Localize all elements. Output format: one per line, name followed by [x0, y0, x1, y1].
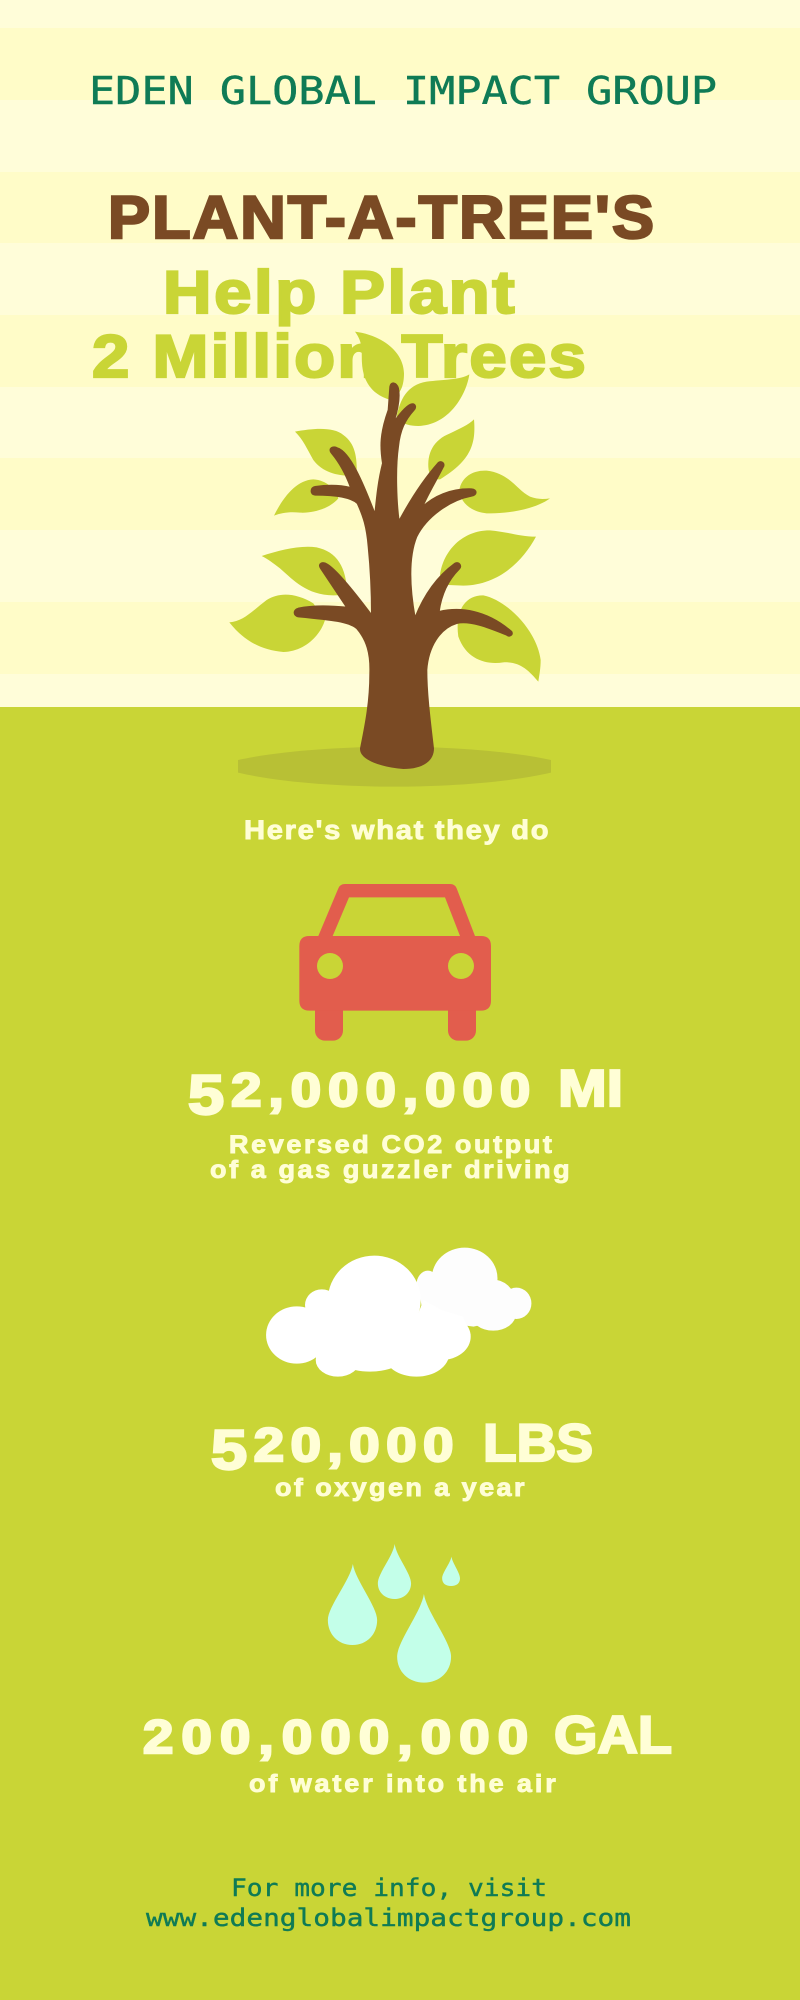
icon: water drops [328, 1544, 460, 1683]
statistic: miles: 2,000,000 [231, 1064, 530, 1116]
statistic: miles: 5 [188, 1063, 224, 1126]
tree trunk and branches [294, 383, 512, 768]
icon: clouds [266, 1248, 531, 1377]
statistic: gallons: 200,000,000 [143, 1711, 528, 1763]
statistic: pounds: 5 [211, 1418, 247, 1481]
icon: tree [229, 332, 550, 768]
text: miles description line two: of a gas guzzler driving [210, 1155, 570, 1184]
heading: help plant line one: Help Plant [163, 259, 515, 326]
statistic: pounds [211, 1414, 593, 1481]
icon: ground shadow [238, 747, 551, 787]
statistic: gallons: GAL [554, 1706, 672, 1765]
footer: more info line: For more info, visit [231, 1874, 547, 1902]
panel: striped sky background [0, 0, 800, 707]
heading: organisation name: EDEN GLOBAL IMPACT GROUP [89, 69, 717, 113]
small back cloud [416, 1248, 531, 1331]
statistic: miles: MI [558, 1060, 623, 1118]
icon: red car [299, 884, 491, 1041]
statistic: miles [188, 1060, 623, 1126]
panel: green ground background [0, 707, 800, 2000]
text: miles description line one: Reversed CO2 output [229, 1130, 552, 1159]
text: section intro: Here's what they do [244, 815, 549, 845]
statistic: gallons [143, 1706, 672, 1765]
tree leaves [229, 332, 550, 682]
statistic: pounds: 20,000 [254, 1419, 453, 1471]
heading: help plant line two: 2 Million Trees [92, 323, 586, 390]
large front cloud [266, 1256, 471, 1377]
text: gallons description: of water into the air [249, 1769, 556, 1798]
footer: website address: www.edenglobalimpactgroup.com [146, 1904, 631, 1932]
title: Plant-a-Tree's: PLANT-A-TREE'S [108, 184, 654, 252]
statistic: pounds: LBS [483, 1414, 593, 1473]
text: pounds description: of oxygen a year [275, 1473, 524, 1502]
